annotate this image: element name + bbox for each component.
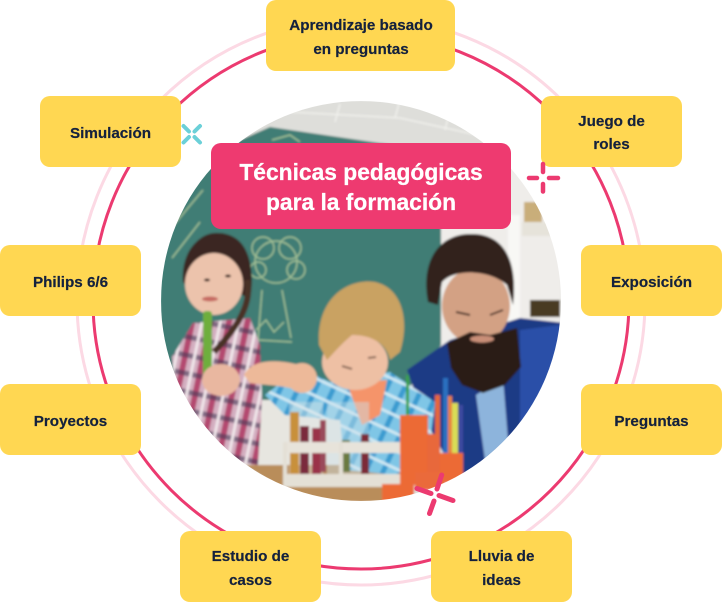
node: Simulación: Simulación <box>70 125 151 142</box>
node: Aprendizaje basado en preguntas: en preguntas <box>313 41 409 58</box>
node: Aprendizaje basado en preguntas: Aprendizaje basado <box>289 17 433 34</box>
node: Lluvia de ideas: ideas <box>482 572 521 589</box>
girl <box>172 233 262 465</box>
central title: Técnicas pedagógicas <box>239 159 483 185</box>
chalkboard <box>160 127 441 400</box>
central photo: teacher and children doing experiment <box>160 100 565 502</box>
central title <box>211 143 511 229</box>
node: Simulación <box>40 96 181 167</box>
central title: para la formación <box>266 189 456 215</box>
table <box>245 465 410 502</box>
lower wall <box>259 400 288 464</box>
pencil cups <box>382 375 463 502</box>
node: Estudio de casos: Estudio de <box>212 548 289 565</box>
node: Juego de roles: roles <box>593 136 630 153</box>
node: Estudio de casos: casos <box>229 572 272 589</box>
icon: teal sparkle <box>184 126 200 142</box>
node: Lluvia de ideas: Lluvia de <box>469 548 534 565</box>
man <box>406 232 560 474</box>
node: Philips 6/6 <box>0 245 141 316</box>
outer light ring <box>77 17 645 585</box>
node: Preguntas <box>581 384 722 455</box>
inner pink ring <box>93 33 629 569</box>
node: Estudio de casos <box>180 531 321 602</box>
node: Aprendizaje basado en preguntas <box>266 0 455 71</box>
icon: pink rotated sparkle <box>417 475 453 514</box>
node: Exposición: Exposición <box>611 274 692 291</box>
node: Lluvia de ideas <box>431 531 572 602</box>
boy <box>244 282 435 475</box>
node: Philips 6/6: Philips 6/6 <box>33 274 108 291</box>
node: Exposición <box>581 245 722 316</box>
icon: pink plus sparkle <box>529 164 558 192</box>
wall <box>241 101 561 494</box>
node: Proyectos: Proyectos <box>34 413 107 430</box>
node: Proyectos <box>0 384 141 455</box>
node: Preguntas: Preguntas <box>614 413 689 430</box>
node: Juego de roles <box>541 96 682 167</box>
right wall <box>440 169 561 346</box>
node: Juego de roles: Juego de <box>578 113 645 130</box>
test tube rack <box>283 402 400 487</box>
chalk drawing <box>167 135 305 342</box>
